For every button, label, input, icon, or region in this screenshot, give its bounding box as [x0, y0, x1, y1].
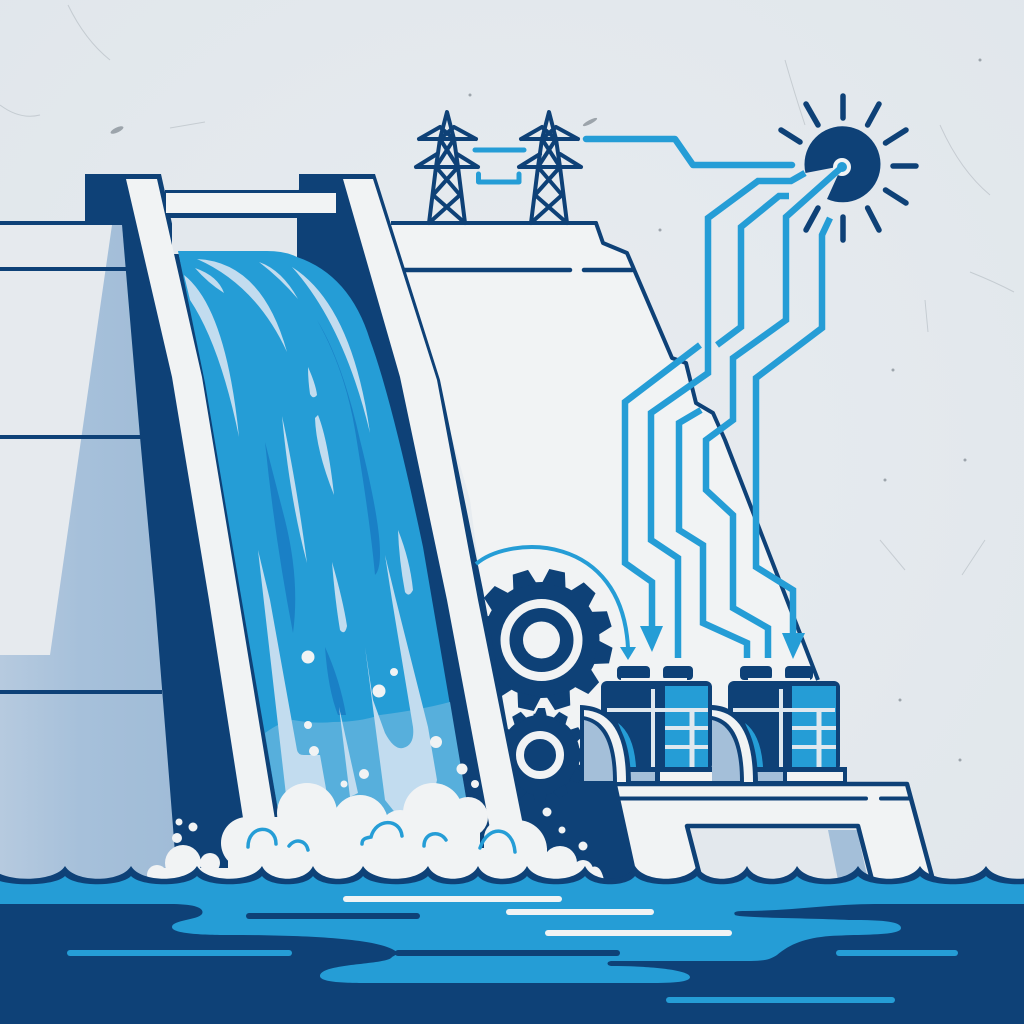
icon: small gear — [493, 708, 642, 882]
icon: sun — [781, 96, 916, 240]
darker streaks — [265, 320, 380, 715]
white pier faces — [126, 179, 528, 850]
foam — [147, 783, 604, 888]
left dam wall — [0, 223, 180, 880]
arrowheads — [620, 626, 805, 660]
navy ripples — [246, 913, 620, 956]
river water — [0, 866, 1024, 1024]
icon: transmission towers — [395, 112, 596, 223]
lower lighter spray — [265, 702, 474, 845]
turbine platform — [617, 784, 933, 880]
energy wires to batteries — [476, 167, 842, 658]
navy dam piers — [85, 174, 535, 880]
waterfall — [178, 251, 474, 845]
battery and turbine unit 1 — [580, 666, 720, 784]
light streaks — [184, 259, 437, 830]
icon: large gear — [470, 568, 613, 712]
battery and turbine unit 2 — [712, 666, 847, 784]
power line connectors — [475, 139, 792, 182]
spray droplets — [172, 650, 588, 850]
cross beam — [165, 190, 336, 254]
right dam body — [391, 223, 818, 880]
white ripples — [343, 896, 732, 936]
blue ripples — [67, 950, 958, 1003]
